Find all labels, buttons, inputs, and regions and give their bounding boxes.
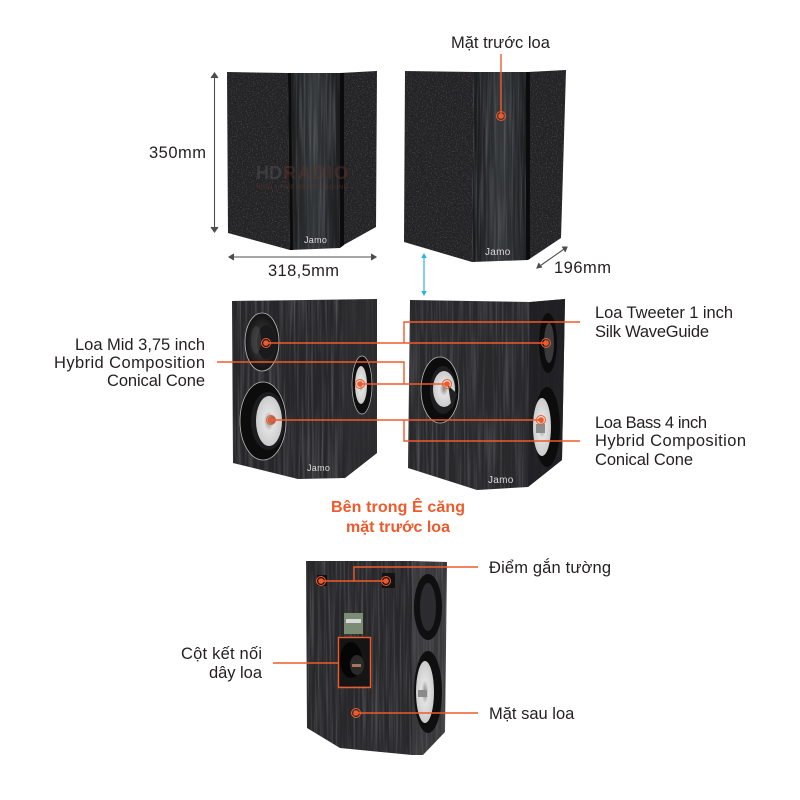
front label with leader: [451, 34, 551, 120]
label: tweeter: Silk WaveGuide: [595, 323, 709, 341]
label: mid driver: Conical Cone: [107, 372, 205, 390]
label: terminal: dây loa: [209, 664, 263, 682]
label: mid driver: Hybrid Composition: [54, 354, 205, 372]
cabinet: [306, 561, 412, 755]
label: mid driver: Loa Mid 3,75 inch: [75, 336, 205, 354]
centre wood strip: [472, 72, 528, 262]
label: mounting points: Điểm gắn tường: [489, 558, 611, 577]
grille left face: [404, 71, 474, 262]
label: tweeter: Loa Tweeter 1 inch: [595, 304, 733, 322]
watermark: RADIO: [283, 163, 348, 183]
leader: mounting points: [316, 567, 478, 586]
label: rear: Mặt sau loa: [489, 705, 575, 723]
depth dimension arrow: [537, 247, 567, 268]
terminal cup: [339, 638, 370, 686]
label: mid driver: [54, 336, 205, 390]
cabinet: [232, 299, 377, 479]
cabinet: [408, 299, 565, 490]
grille right face: [528, 70, 566, 260]
brand logo: Jamo: [304, 235, 327, 245]
depth label: 196mm: [554, 259, 611, 277]
heading: orange caption: Bên trong Ê căng: [331, 497, 465, 516]
watermark: [256, 163, 349, 191]
heading: orange caption: mặt trước loa: [346, 519, 450, 536]
height label: 350mm: [149, 144, 206, 162]
speaker: open front view right: [408, 299, 565, 490]
mid driver: [421, 357, 459, 423]
speaker grille left face: [227, 72, 290, 250]
tweeter driver: [352, 356, 372, 414]
label: bass: Hybrid Composition: [595, 432, 746, 450]
speaker: rear view: [306, 561, 447, 755]
side mid driver: [414, 574, 442, 640]
leader: rear face: [352, 708, 478, 718]
watermark: HIGH - FINE MEDIA - SOUND: [256, 185, 349, 191]
label: bass: [595, 414, 746, 469]
speaker: open front view left: [232, 299, 377, 479]
side bass driver: [414, 651, 442, 733]
leader: tweeter callout lines: [262, 322, 580, 348]
label: bass: Conical Cone: [595, 451, 693, 469]
speaker: closed front view right: [404, 70, 566, 262]
leader: terminal box: [273, 638, 370, 688]
label: tweeter: [595, 304, 733, 341]
width dimension arrow: [229, 254, 376, 260]
label: bass: Loa Bass 4 inch: [595, 414, 707, 432]
product sticker: [344, 613, 363, 634]
heading: orange caption: [331, 497, 465, 536]
label: terminal: Cột kết nối: [181, 645, 262, 663]
blue double arrow: [421, 253, 427, 296]
brand logo: Jamo: [488, 475, 514, 486]
bass driver: [240, 382, 286, 460]
tweeter driver: [539, 313, 557, 373]
bass driver: [533, 387, 560, 467]
brand logo: Jamo: [307, 463, 330, 473]
watermark: HD: [256, 163, 282, 183]
height dimension arrow: [211, 73, 218, 232]
speaker grille right face: [340, 71, 377, 247]
mounting slots: [317, 575, 327, 586]
mid driver: [245, 313, 279, 371]
leader: bass callout lines: [266, 416, 580, 441]
speaker: closed front view with dimensions: [227, 71, 377, 250]
brand logo: Jamo: [485, 247, 511, 258]
speaker centre wood strip: [288, 73, 340, 250]
width label: 318,5mm: [268, 262, 339, 280]
label: terminal: [181, 645, 263, 682]
leader: mid callout lines: [217, 362, 452, 388]
front label with leader: Mặt trước loa: [451, 34, 551, 52]
